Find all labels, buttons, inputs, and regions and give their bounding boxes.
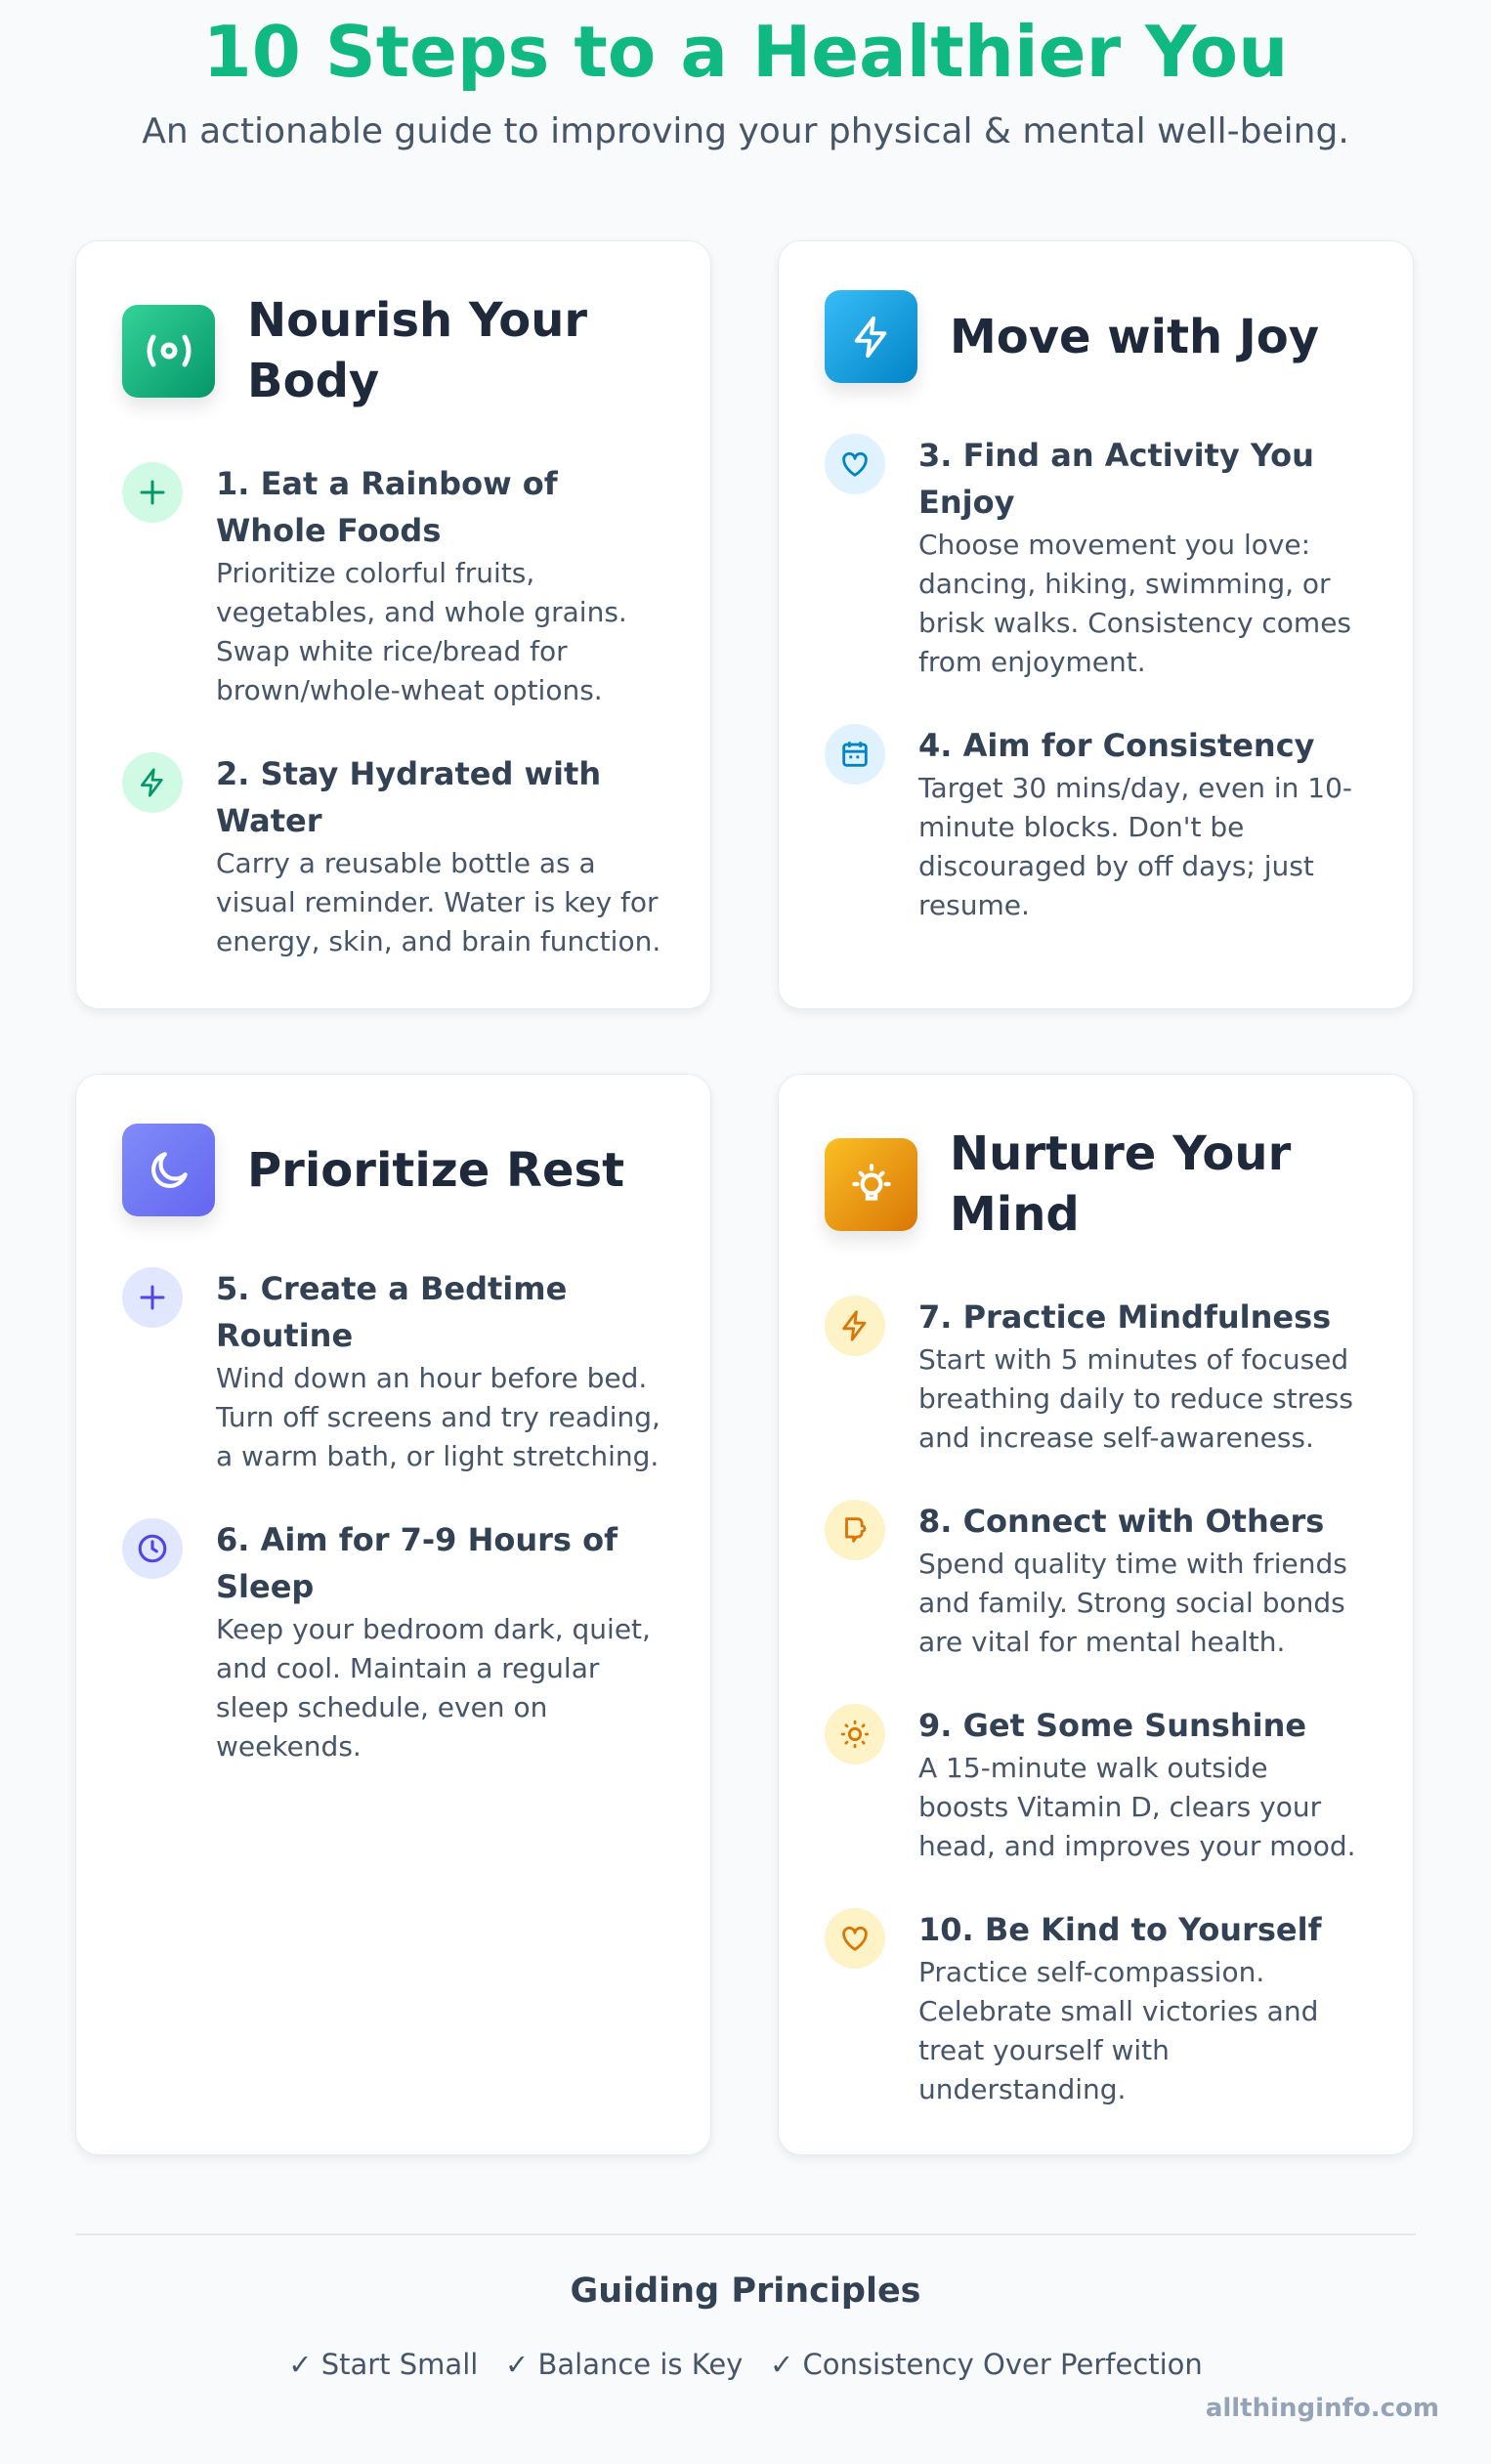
item 9 [825, 1704, 1356, 1862]
item 5: Wind down an hour before bed. Turn off screens and try reading, a warm bath, or light stretching. [216, 1362, 660, 1472]
header: move: Move with Joy [950, 309, 1319, 363]
item 4: 4. Aim for Consistency [918, 727, 1315, 764]
item 10 [825, 1908, 1322, 2105]
icon: bolt [122, 752, 183, 813]
item 1: 1. Eat a Rainbow of Whole Foods [216, 465, 558, 549]
icon: calendar [825, 724, 885, 785]
watermark: allthinginfo.com [1206, 2394, 1439, 2423]
footer heading: Guiding Principles [570, 2272, 921, 2311]
icon: chat [825, 1500, 885, 1560]
item 9: A 15-minute walk outside boosts Vitamin D, clears your head, and improves your mood. [918, 1752, 1356, 1862]
icon: plus [122, 462, 183, 523]
item 2: 2. Stay Hydrated with Water [216, 755, 601, 839]
item 6: 6. Aim for 7-9 Hours of Sleep [216, 1521, 618, 1605]
icon: heart [825, 434, 885, 494]
item 3: Choose movement you love: dancing, hiking, swimming, or brisk walks. Consistency comes from enjoyment. [918, 529, 1351, 678]
item 4: Target 30 mins/day, even in 10-minute blocks. Don't be discouraged by off days; just resume. [918, 772, 1352, 921]
item 3: 3. Find an Activity You Enjoy [918, 437, 1314, 521]
item 8 [825, 1500, 1347, 1658]
item 7: 7. Practice Mindfulness [918, 1298, 1331, 1336]
item 10: Practice self-compassion. Celebrate small victories and treat yourself with understanding. [918, 1956, 1318, 2105]
item 10: 10. Be Kind to Yourself [918, 1911, 1321, 1948]
item 5: 5. Create a Bedtime Routine [216, 1270, 567, 1354]
header: nourish: Nourish Your Body [247, 293, 587, 408]
header: mind: Nurture Your Mind [950, 1126, 1291, 1242]
item 1: Prioritize colorful fruits, vegetables, and whole grains. Swap white rice/bread for brown/whole-wheat options. [216, 557, 627, 706]
item 8: 8. Connect with Others [918, 1503, 1324, 1540]
item 7: Start with 5 minutes of focused breathing daily to reduce stress and increase self-awareness. [918, 1343, 1353, 1454]
item 2 [122, 752, 660, 957]
icon: nourish [122, 305, 215, 397]
item 5 [122, 1267, 660, 1472]
icon: bolt [825, 290, 917, 383]
panel: nourish your body [75, 240, 711, 1009]
subtitle: An actionable guide to improving your physical & mental well-being. [142, 111, 1349, 151]
icon: moon [122, 1124, 215, 1216]
icon: clock [122, 1518, 183, 1579]
icon: sun [825, 1704, 885, 1764]
item 6 [122, 1518, 651, 1763]
panel: prioritize rest [75, 1074, 711, 2155]
icon: bulb [825, 1137, 917, 1231]
item 9: 9. Get Some Sunshine [918, 1707, 1306, 1744]
item 1 [122, 462, 627, 706]
icon: heart [825, 1908, 885, 1969]
icon: plus [122, 1267, 183, 1328]
item 7 [825, 1296, 1353, 1454]
title: 10 Steps to a Healthier You [203, 11, 1288, 93]
item 6: Keep your bedroom dark, quiet, and cool. Maintain a regular sleep schedule, even on weekends. [216, 1613, 651, 1763]
icon: bolt [825, 1296, 885, 1356]
principles list: ✓ Start Small ✓ Balance is Key ✓ Consistency Over Perfection [288, 2348, 1203, 2381]
header: move [821, 290, 1319, 397]
header: rest [119, 1124, 624, 1229]
item 8: Spend quality time with friends and family. Strong social bonds are vital for mental health. [918, 1548, 1347, 1658]
item 3 [825, 434, 1351, 678]
item 4 [825, 724, 1352, 921]
header: rest: Prioritize Rest [247, 1143, 624, 1198]
panel: nurture your mind [778, 1074, 1414, 2155]
panel: move with joy [778, 240, 1414, 1009]
item 2: Carry a reusable bottle as a visual reminder. Water is key for energy, skin, and brain function. [216, 847, 660, 957]
